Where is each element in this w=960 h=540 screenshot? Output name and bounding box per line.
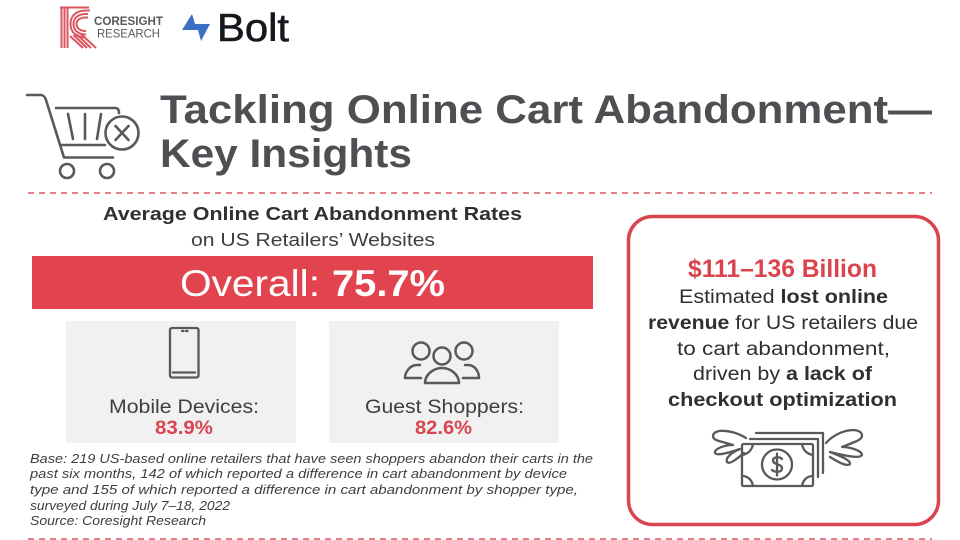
logo: Bolt xyxy=(182,7,289,50)
text: lost revenue description: revenue for US retailers due xyxy=(648,313,918,334)
banner: overall rate xyxy=(32,256,593,309)
card: guest shoppers xyxy=(329,321,559,443)
logo: Bolt: Bolt xyxy=(217,7,289,50)
icon: smartphone xyxy=(170,328,198,378)
icon: group of people xyxy=(405,342,479,383)
text: lost revenue description: checkout optimization xyxy=(668,390,897,411)
source note xyxy=(29,451,593,528)
text: lost revenue description: Estimated lost online xyxy=(679,287,888,308)
panel: lost revenue xyxy=(628,216,938,524)
logo: Coresight Research: CORESIGHT xyxy=(94,14,164,28)
heading: average abandonment rates: on US Retailers’ Websites xyxy=(191,230,435,250)
source note: type and 155 of which reported a difference in cart abandonment by shopper type, xyxy=(30,482,578,497)
text: lost revenue description xyxy=(648,287,918,411)
icon: money with wings xyxy=(713,430,862,486)
value: mobile rate: 83.9% xyxy=(155,418,213,439)
heading: average abandonment rates xyxy=(103,203,522,250)
source note: past six months, 142 of which reported a difference in cart abandonment by device xyxy=(29,466,567,481)
source note: Base: 219 US-based online retailers that have seen shoppers abandon their carts in the xyxy=(30,451,593,466)
title: Tackling Online Cart Abandonment— xyxy=(160,88,932,132)
text: lost revenue description: to cart abandonment, xyxy=(677,339,890,360)
stat: lost revenue amount: $111–136 Billion xyxy=(688,255,877,283)
text: lost revenue description: driven by a lack of xyxy=(693,364,873,385)
banner: overall rate: 75.7% xyxy=(332,263,445,304)
heading: average abandonment rates: Average Online Cart Abandonment Rates xyxy=(103,203,522,224)
label: mobile devices: Mobile Devices: xyxy=(109,397,259,418)
title: Key Insights xyxy=(160,132,412,176)
banner: overall rate: Overall: xyxy=(180,263,320,304)
value: guest rate: 82.6% xyxy=(415,418,472,439)
card: mobile devices xyxy=(66,321,296,443)
source note: surveyed during July 7–18, 2022 xyxy=(30,498,231,513)
logo: Coresight Research xyxy=(60,7,164,48)
icon: shopping cart with x xyxy=(27,95,138,178)
logo: Coresight Research: RESEARCH xyxy=(97,26,160,40)
source note: Source: Coresight Research xyxy=(30,513,206,528)
title xyxy=(160,88,932,176)
label: guest shoppers: Guest Shoppers: xyxy=(365,397,524,418)
